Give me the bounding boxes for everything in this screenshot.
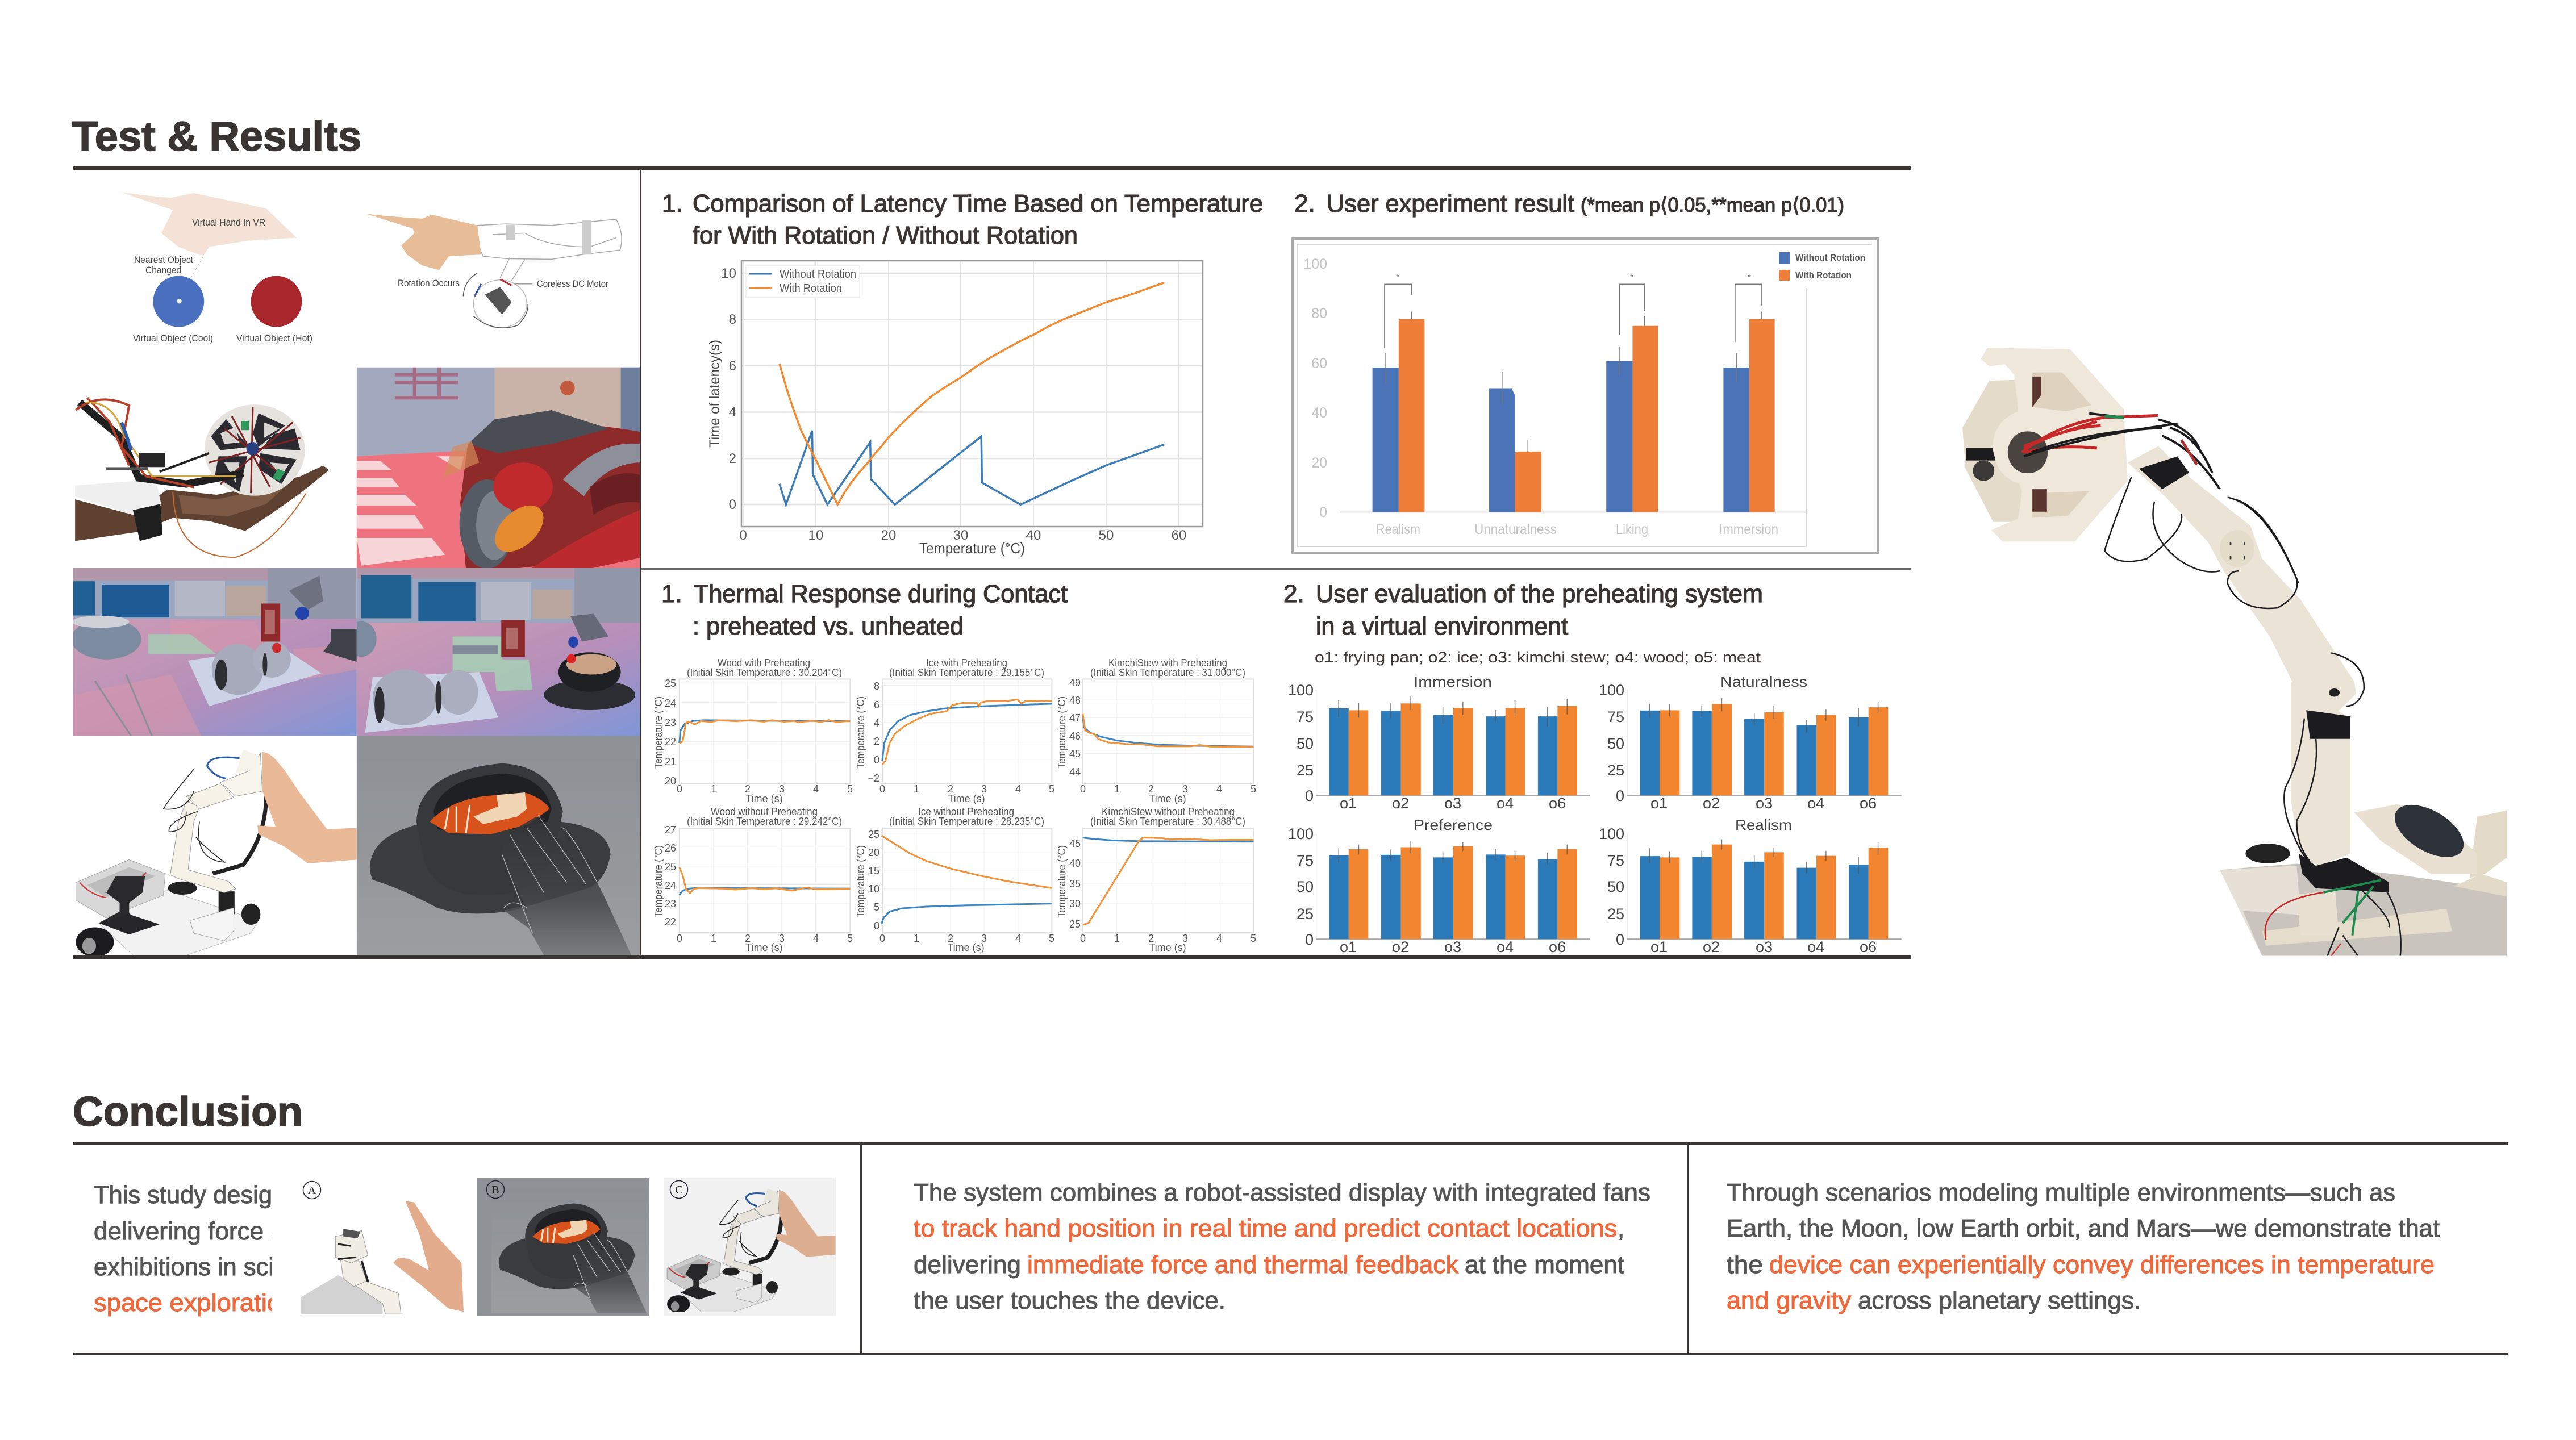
- x tick labels: 2: [1148, 783, 1154, 795]
- x tick labels: 4: [813, 933, 819, 944]
- x tick labels: 5: [1049, 933, 1054, 944]
- y tick labels: 8: [874, 681, 879, 692]
- y tick labels: 45: [1069, 838, 1081, 849]
- text block: conclusion column 1 (clipped): This study desig: [94, 1181, 272, 1209]
- y axis titles: Temperature (°C): [855, 845, 866, 917]
- y tick labels: 21: [665, 756, 676, 767]
- y tick labels: 49: [1069, 677, 1081, 688]
- x tick labels: 0: [879, 783, 885, 795]
- chart titles: (Initial Skin Temperature : 28.235°C): [889, 816, 1044, 827]
- y tick labels: 48: [1069, 695, 1081, 706]
- number: 1: 1.: [661, 580, 682, 608]
- y tick labels: 22: [665, 916, 676, 928]
- x tick labels: 3: [981, 783, 987, 795]
- text block: conclusion column 2: ,: [1618, 1214, 1624, 1242]
- y axis titles: [653, 696, 1068, 917]
- y tick labels: 45: [1069, 748, 1081, 759]
- line chart: time of latency: 0: [729, 497, 736, 512]
- y tick labels: 23: [665, 717, 676, 728]
- diagram: virtual hand and virtual objects: [121, 192, 312, 344]
- diagram: virtual hand and virtual objects: Virtual Object (Cool): [133, 333, 213, 344]
- x tick labels: o1: [1340, 795, 1357, 812]
- number: 1: 1.: [662, 190, 683, 218]
- y axis titles: Temperature (°C): [855, 696, 866, 769]
- chart titles: [687, 657, 1245, 827]
- x tick labels: 0: [677, 783, 682, 795]
- y tick labels: 35: [1069, 878, 1081, 890]
- x tick labels: 5: [847, 933, 853, 944]
- x tick labels: [677, 783, 1256, 953]
- image C: robot and hand: [664, 1178, 836, 1316]
- chart titles: Wood without Preheating: [711, 806, 818, 817]
- y tick labels: 100: [1599, 682, 1624, 699]
- text block: conclusion column 3: Through scenarios modeling multiple environments—such as: [1727, 1179, 2395, 1207]
- heading: latency comparison: for With Rotation / Without Rotation: [693, 222, 1078, 249]
- photo: robot arm meeting a raised hand: [73, 736, 357, 957]
- x tick labels: 4: [1216, 783, 1222, 795]
- bar chart: realism, unnaturalness, liking, immersion: Liking: [1616, 521, 1648, 537]
- y tick labels: 44: [1069, 766, 1081, 778]
- line chart: time of latency: 60: [1172, 528, 1186, 543]
- bar chart: realism, unnaturalness, liking, immersion: 80: [1311, 306, 1327, 322]
- x tick labels: 1: [711, 933, 716, 944]
- y tick labels: 25: [665, 678, 676, 689]
- chart titles: Wood with Preheating: [718, 657, 810, 669]
- y tick labels: 75: [1607, 852, 1624, 869]
- x tick labels: 5: [1251, 783, 1256, 795]
- y tick labels: 100: [1599, 825, 1624, 842]
- label: B: B: [491, 1184, 499, 1196]
- heading: preheating evaluation: User evaluation of the preheating system: [1316, 580, 1763, 608]
- chart legend: Without Rotation: [1795, 252, 1865, 263]
- heading: user experiment result: User experiment result: [1327, 190, 1574, 218]
- text block: conclusion column 1 (clipped): [94, 1181, 285, 1317]
- line chart: time of latency: Time of latency(s): [707, 340, 723, 448]
- x tick labels: 1: [1114, 783, 1120, 795]
- diagram: virtual hand and virtual objects: Virtual Hand In VR: [192, 217, 265, 228]
- text block: conclusion column 3: across planetary settings.: [1858, 1287, 2141, 1314]
- x tick labels: o2: [1703, 938, 1720, 955]
- x tick labels: Time (s): [948, 793, 985, 804]
- x tick labels: 2: [948, 783, 953, 795]
- text block: conclusion column 2: to track hand position in real time and predict contact locations: [914, 1214, 1617, 1242]
- panel: user experiment result: [1293, 190, 1878, 553]
- x tick labels: 5: [1251, 933, 1256, 944]
- x tick labels: [1340, 795, 1877, 955]
- photo: robot arm with gripper on base plate: [1962, 348, 2507, 956]
- x tick labels: o1: [1340, 938, 1357, 955]
- x tick labels: 4: [1015, 933, 1021, 944]
- heading: thermal response: Thermal Response during Contact: [694, 580, 1068, 608]
- label: C: C: [675, 1184, 683, 1196]
- chart legend: [746, 266, 860, 298]
- line chart: time of latency: 10: [808, 528, 823, 543]
- x tick labels: o1: [1650, 938, 1668, 955]
- x tick labels: o3: [1756, 795, 1773, 812]
- heading: thermal response: [693, 580, 1068, 640]
- y tick labels: 25: [1297, 762, 1314, 779]
- bar chart: realism, unnaturalness, liking, immersion: 40: [1311, 405, 1327, 421]
- x tick labels: 3: [1182, 783, 1188, 795]
- heading: Test & Results: Test & Results: [72, 114, 361, 160]
- text block: conclusion column 2: the user touches the device.: [914, 1287, 1226, 1314]
- y tick labels: 25: [665, 861, 676, 873]
- image: VR scene with rocks, can and stew, right view: [346, 568, 640, 736]
- note: significance levels: (*mean p⟨0.05,**mean p⟨0.01): [1581, 193, 1844, 216]
- bar chart: realism, unnaturalness, liking, immersion: *: [1396, 272, 1399, 281]
- y tick labels: 100: [1288, 825, 1314, 842]
- y tick labels: [1288, 682, 1624, 948]
- chart titles: (Initial Skin Temperature : 30.488°C): [1090, 816, 1245, 827]
- x tick labels: o2: [1703, 795, 1720, 812]
- y tick labels: 50: [1607, 735, 1624, 752]
- x tick labels: 1: [711, 783, 716, 795]
- chart titles: (Initial Skin Temperature : 30.204°C): [687, 667, 842, 678]
- image B: stew bowl: [477, 1178, 651, 1316]
- text block: conclusion column 2: at the moment: [1465, 1251, 1624, 1279]
- diagram: virtual hand and virtual objects: Virtual Object (Hot): [236, 333, 312, 344]
- x tick labels: o4: [1807, 938, 1824, 955]
- x tick labels: 4: [1015, 783, 1021, 795]
- chart titles: Ice with Preheating: [926, 657, 1007, 669]
- photo: hand holding wired sphere device: [75, 398, 329, 557]
- chart legend: [1769, 245, 1872, 288]
- row divider: [641, 568, 1911, 570]
- text block: conclusion column 2: delivering: [914, 1251, 1021, 1279]
- section rule: Conclusion: [73, 1142, 2508, 1145]
- y tick labels: 4: [874, 717, 879, 729]
- x tick labels: o4: [1497, 795, 1514, 812]
- chart subtitles: [1414, 673, 1807, 833]
- x tick labels: 3: [981, 933, 987, 944]
- heading: preheating evaluation: in a virtual environment: [1316, 612, 1568, 640]
- x tick labels: 4: [813, 783, 819, 795]
- chart titles: (Initial Skin Temperature : 29.155°C): [889, 667, 1044, 678]
- column divider: [1687, 1145, 1689, 1353]
- y tick labels: 0: [1616, 787, 1624, 804]
- bar chart: realism, unnaturalness, liking, immersion: Unnaturalness: [1474, 521, 1557, 537]
- heading: latency comparison: [693, 190, 1263, 249]
- x tick labels: o3: [1444, 795, 1461, 812]
- x tick labels: 1: [1114, 933, 1120, 944]
- line charts: six thermal response plots: [653, 657, 1256, 953]
- x tick labels: 5: [847, 783, 853, 795]
- y tick labels: 24: [665, 698, 676, 709]
- x tick labels: 3: [779, 783, 785, 795]
- x tick labels: o6: [1549, 795, 1566, 812]
- y tick labels: 0: [1305, 787, 1314, 804]
- bar chart: realism, unnaturalness, liking, immersion: 100: [1303, 256, 1327, 272]
- x tick labels: Time (s): [1149, 942, 1186, 953]
- x tick labels: o2: [1392, 938, 1409, 955]
- line chart: time of latency: 20: [881, 528, 896, 543]
- text block: conclusion column 3: the: [1727, 1251, 1763, 1279]
- line chart: time of latency: 2: [729, 451, 736, 466]
- line chart: time of latency: 0: [739, 528, 747, 543]
- label: C: [670, 1180, 687, 1199]
- panel: latency vs temperature: [662, 190, 1263, 557]
- y tick labels: 75: [1297, 852, 1314, 869]
- line chart: time of latency: 40: [1026, 528, 1041, 543]
- y tick labels: 50: [1297, 735, 1314, 752]
- chart titles: (Initial Skin Temperature : 31.000°C): [1090, 667, 1245, 678]
- y tick labels: 25: [868, 829, 879, 840]
- chart titles: (Initial Skin Temperature : 29.242°C): [687, 816, 842, 827]
- text block: conclusion column 3: Earth, the Moon, low Earth orbit, and Mars—we demonstrate that: [1727, 1214, 2440, 1242]
- y tick labels: 22: [665, 736, 676, 748]
- x tick labels: o1: [1650, 795, 1668, 812]
- x tick labels: Time (s): [947, 942, 985, 953]
- number: 2: 2.: [1294, 190, 1315, 218]
- section rule: Test & Results: [73, 166, 1911, 170]
- y tick labels: 5: [874, 901, 879, 913]
- text block: conclusion column 2: immediate force and thermal feedback: [1027, 1251, 1459, 1279]
- label: A: A: [308, 1184, 316, 1197]
- y tick labels: 25: [1607, 762, 1624, 779]
- line chart: time of latency: 4: [729, 404, 736, 420]
- label: B: [486, 1180, 505, 1199]
- x tick labels: 0: [879, 933, 885, 944]
- y axis titles: Temperature (°C): [653, 845, 664, 917]
- y tick labels: 30: [1069, 898, 1081, 909]
- y axis titles: Temperature (°C): [1056, 696, 1068, 769]
- y axis titles: Temperature (°C): [1056, 845, 1068, 917]
- line chart: time of latency: 10: [721, 266, 736, 281]
- y tick labels: −2: [868, 773, 879, 784]
- y tick labels: 6: [874, 699, 879, 711]
- x tick labels: Time (s): [745, 942, 783, 953]
- chart subtitles: Immersion: [1414, 673, 1492, 690]
- y tick labels: 0: [874, 920, 879, 932]
- bar chart: realism, unnaturalness, liking, immersion: 0: [1319, 504, 1327, 520]
- image: VR stew bowl with translucent hand: [357, 736, 640, 955]
- y tick labels: 100: [1288, 682, 1314, 699]
- image: VR scene with rocks and can, left view: [71, 568, 357, 736]
- y tick labels: 0: [1616, 931, 1624, 948]
- heading: Conclusion: Conclusion: [73, 1089, 303, 1135]
- heading: preheating evaluation: [1316, 580, 1763, 640]
- x tick labels: 1: [914, 783, 919, 795]
- bar chart: realism, unnaturalness, liking, immersion: [1293, 239, 1878, 553]
- x tick labels: o6: [1549, 938, 1566, 955]
- chart legend: Without Rotation: [780, 268, 856, 281]
- line chart: time of latency: [707, 261, 1203, 557]
- diagram: virtual hand and virtual objects: Changed: [145, 265, 181, 276]
- heading: thermal response: : preheated vs. unheated: [693, 612, 964, 640]
- bar charts: immersion, naturalness, preference, realism: [1288, 673, 1902, 955]
- key: object list: o1: frying pan; o2: ice; o3: kimchi stew; o4: wood; o5: meat: [1315, 649, 1761, 666]
- chart legend: With Rotation: [1795, 270, 1852, 281]
- y tick labels: 75: [1607, 708, 1624, 725]
- x tick labels: o6: [1860, 795, 1877, 812]
- bar chart: realism, unnaturalness, liking, immersion: Immersion: [1719, 521, 1778, 537]
- y tick labels: 75: [1297, 708, 1314, 725]
- bar chart: realism, unnaturalness, liking, immersion: *: [1748, 272, 1751, 281]
- y tick labels: 0: [1305, 931, 1314, 948]
- section bottom rule: [73, 1353, 2508, 1355]
- y tick labels: 25: [1607, 905, 1624, 923]
- x tick labels: 3: [779, 933, 785, 944]
- y tick labels: 27: [665, 824, 676, 836]
- chart titles: KimchiStew without Preheating: [1102, 806, 1235, 817]
- x tick labels: 2: [1148, 933, 1154, 944]
- y tick labels: 10: [868, 883, 879, 895]
- y tick labels: 47: [1069, 712, 1081, 724]
- diagram: hand with rotating wearable device: Coreless DC Motor: [537, 278, 608, 289]
- x tick labels: 0: [1080, 783, 1086, 795]
- x tick labels: Time (s): [1149, 793, 1186, 804]
- x tick labels: 5: [1049, 783, 1054, 795]
- y tick labels: 26: [665, 842, 676, 854]
- x tick labels: o3: [1444, 938, 1461, 955]
- number: 2: 2.: [1283, 580, 1304, 608]
- line chart: time of latency: 6: [729, 358, 736, 374]
- y tick labels: 50: [1607, 878, 1624, 895]
- text block: conclusion column 3: [1727, 1179, 2440, 1314]
- y tick labels: 40: [1069, 858, 1081, 869]
- text block: conclusion column 1 (clipped): delivering force a: [94, 1217, 285, 1245]
- x tick labels: 1: [914, 933, 919, 944]
- panel: preheating evaluation: [1283, 580, 1902, 955]
- text block: conclusion column 3: device can experientially convey differences in temperature: [1769, 1251, 2435, 1279]
- diagram: virtual hand and virtual objects: Nearest Object: [134, 254, 193, 265]
- y tick labels: 25: [1069, 919, 1081, 930]
- line chart: time of latency: Temperature (°C): [919, 540, 1025, 557]
- x tick labels: 2: [745, 933, 751, 944]
- text block: conclusion column 3: and gravity: [1727, 1287, 1851, 1314]
- bar chart: realism, unnaturalness, liking, immersion: 60: [1311, 356, 1327, 372]
- text block: conclusion column 2: [914, 1179, 1650, 1314]
- bar chart: realism, unnaturalness, liking, immersion: 20: [1311, 455, 1327, 471]
- label: A: [303, 1182, 320, 1199]
- x tick labels: Time (s): [745, 793, 783, 804]
- chart titles: KimchiStew with Preheating: [1108, 657, 1227, 669]
- text block: conclusion column 1 (clipped): space exploratio: [94, 1289, 281, 1317]
- y tick labels: 15: [868, 865, 879, 876]
- x tick labels: 3: [1182, 933, 1188, 944]
- image A: hand near robot arm: [301, 1182, 464, 1314]
- x tick labels: o2: [1392, 795, 1409, 812]
- panel: thermal response: [653, 580, 1256, 953]
- x tick labels: 0: [1080, 933, 1086, 944]
- y tick labels: 2: [874, 736, 879, 747]
- y tick labels: 0: [874, 754, 879, 766]
- x tick labels: o4: [1497, 938, 1514, 955]
- column divider: [860, 1145, 862, 1353]
- x tick labels: o6: [1860, 938, 1877, 955]
- y tick labels: 46: [1069, 731, 1081, 742]
- diagram: hand with rotating wearable device: Rotation Occurs: [398, 278, 460, 289]
- line chart: time of latency: 50: [1099, 528, 1114, 543]
- diagram: hand with rotating wearable device: [366, 214, 622, 328]
- chart subtitles: Preference: [1414, 816, 1493, 833]
- chart subtitles: Realism: [1735, 816, 1792, 833]
- text block: conclusion column 1 (clipped): exhibitions in sci: [94, 1253, 274, 1281]
- chart legend: With Rotation: [780, 282, 842, 295]
- section bottom rule: [73, 955, 1911, 959]
- y axis titles: Temperature (°C): [653, 696, 664, 769]
- y tick labels: 20: [665, 775, 676, 787]
- column divider: [640, 170, 641, 955]
- panel: image grid of prototype and VR scenes: [71, 192, 640, 957]
- y tick labels: 25: [1297, 905, 1314, 923]
- y tick labels: 50: [1297, 878, 1314, 895]
- y tick labels: 24: [665, 880, 676, 891]
- x tick labels: o4: [1807, 795, 1824, 812]
- x tick labels: 4: [1216, 933, 1222, 944]
- bar chart: realism, unnaturalness, liking, immersion: Realism: [1376, 521, 1420, 537]
- y tick labels: 20: [868, 847, 879, 858]
- chart titles: Ice without Preheating: [918, 806, 1014, 817]
- chart subtitles: Naturalness: [1720, 673, 1807, 690]
- x tick labels: o3: [1756, 938, 1773, 955]
- x tick labels: 2: [948, 933, 953, 944]
- y tick labels: [665, 677, 1081, 932]
- x tick labels: 2: [745, 783, 751, 795]
- bar chart: realism, unnaturalness, liking, immersion: *: [1630, 272, 1633, 281]
- x tick labels: 0: [677, 933, 682, 944]
- line chart: time of latency: 30: [953, 528, 968, 543]
- heading: latency comparison: Comparison of Latency Time Based on Temperature: [693, 190, 1263, 218]
- image: VR can being touched by hand: [357, 368, 640, 569]
- line chart: time of latency: 8: [729, 312, 736, 327]
- y tick labels: 23: [665, 898, 676, 909]
- text block: conclusion column 2: The system combines a robot-assisted display with integrated fans: [914, 1179, 1650, 1207]
